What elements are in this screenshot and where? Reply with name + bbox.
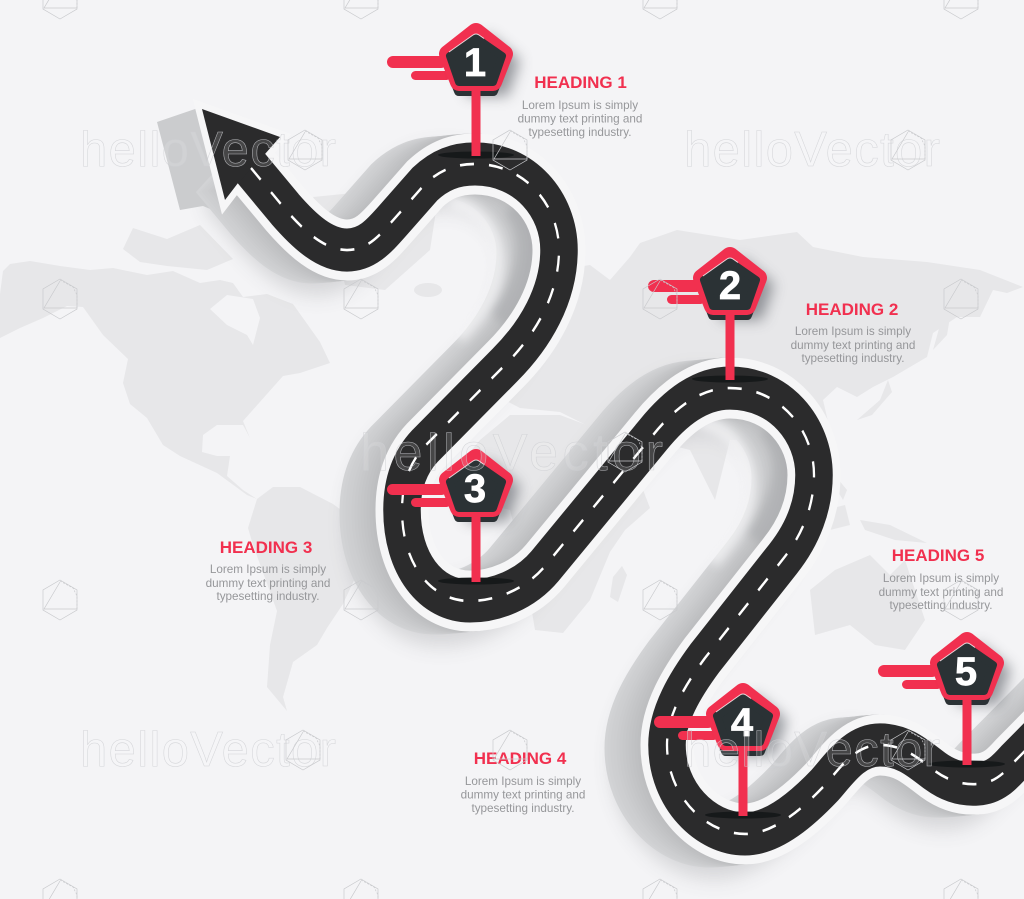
road edge [251, 164, 1024, 834]
text block 2: typesetting industry. [801, 352, 905, 365]
text block 1 [518, 73, 642, 139]
madagascar [610, 566, 627, 602]
watermark: helloVector [80, 723, 336, 777]
text block 3: Lorem Ipsum is simply [210, 563, 326, 576]
text block 5: Lorem Ipsum is simply [883, 572, 999, 585]
road extrusion [157, 108, 1024, 837]
text block 5: HEADING 5 [892, 546, 984, 565]
text block 2: dummy text printing and [791, 339, 915, 352]
arrow head edge [202, 109, 280, 200]
watermark: helloVector [684, 123, 940, 177]
asphalt [251, 164, 1024, 834]
text block 4: Lorem Ipsum is simply [465, 775, 581, 788]
text block 3 [206, 538, 330, 603]
text block 4: HEADING 4 [474, 749, 567, 768]
text block 3: typesetting industry. [216, 590, 320, 603]
pin 1 [387, 32, 520, 158]
watermark: helloVector [684, 723, 940, 777]
text block 4: typesetting industry. [471, 802, 575, 815]
text block 1: dummy text printing and [518, 112, 642, 126]
africa [455, 415, 650, 633]
japan and sakhalin [857, 317, 950, 420]
text block 3: HEADING 3 [220, 538, 312, 557]
pin 3 [387, 458, 520, 584]
pin 1: 1 [464, 41, 486, 85]
pin 5: 5 [955, 650, 977, 694]
pin 4: 4 [731, 701, 754, 745]
southeast asia islands [785, 505, 927, 543]
pin 2 [648, 256, 774, 382]
hudson bay [210, 295, 260, 345]
inner bend darkening [498, 205, 786, 540]
north america [0, 261, 330, 499]
world map [0, 185, 1023, 711]
lane dashes [251, 164, 1024, 834]
pin 2: 2 [719, 264, 741, 308]
text block 4 [461, 749, 585, 815]
text block 4: dummy text printing and [461, 788, 585, 802]
text block 2 [791, 300, 915, 365]
road soft shadow [221, 178, 1024, 848]
south america [248, 487, 375, 711]
greenland [313, 185, 440, 290]
road [202, 109, 1024, 834]
iceland [414, 283, 442, 297]
text block 1: Lorem Ipsum is simply [522, 99, 638, 112]
eurasia [490, 230, 1023, 500]
arrow head [202, 109, 280, 200]
text block 2: HEADING 2 [806, 300, 898, 319]
text block 1: HEADING 1 [534, 73, 627, 92]
text block 3: dummy text printing and [206, 577, 330, 590]
pin 3: 3 [464, 467, 486, 511]
text block 5: dummy text printing and [879, 586, 1003, 599]
watermark: helloVector [360, 424, 663, 482]
inner bend soft fade [450, 203, 749, 562]
watermark: helloVector [80, 123, 336, 177]
australia [810, 555, 925, 650]
text block 2: Lorem Ipsum is simply [795, 325, 911, 338]
arrow head extrusion [157, 108, 250, 240]
text block 5 [879, 546, 1003, 612]
text block 1: typesetting industry. [528, 126, 632, 139]
text block 5: typesetting industry. [889, 599, 993, 612]
pin 4 [654, 692, 787, 818]
arctic islands [123, 225, 233, 270]
pin 5 [878, 641, 1011, 768]
